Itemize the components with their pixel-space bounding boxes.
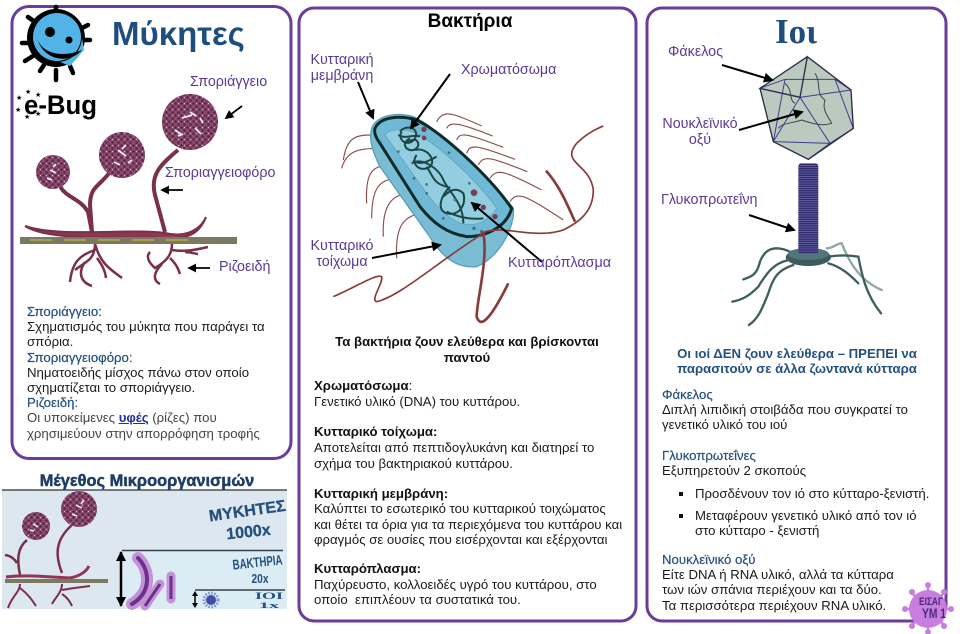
text: glycoproteins: Εξυπηρετούν 2 σκοπούς <box>662 463 806 478</box>
text: glycoproteins <box>662 448 806 478</box>
chart: microorganism size comparison: ΙΟΙ <box>255 591 284 601</box>
text: cytoplasm: οποίο επιπλέουν τα συστατικά του. <box>314 592 521 607</box>
panel: bacteria <box>299 8 636 621</box>
text block: fungi definitions: Ριζοειδή: <box>27 395 78 410</box>
text: nucleic acid: των ιών σπάνια περιέχουν και τα δύο. <box>662 582 882 597</box>
text: chromosome: Χρωματόσωμα: <box>314 378 412 393</box>
text: cell membrane: και θέτει τα όρια για τα περιεχόμενα του κυττάρου και <box>314 517 622 532</box>
text: viruses intro: Οι ιοί ΔΕΝ ζουν ελεύθερα – ΠΡΕΠΕΙ να <box>677 346 917 361</box>
text block: fungi definitions: Σποριαγγειοφόρο: <box>27 350 133 365</box>
text block: fungi definitions: Νηματοειδής μίσχος πάνω στον οποίο <box>27 365 249 380</box>
title: viruses: Ιοι <box>775 12 817 51</box>
text block: fungi definitions: Οι υποκείμενες υφές (ρίζες) που <box>27 410 217 425</box>
arrow: sporangiophore <box>162 189 183 191</box>
text block: fungi definitions: σπόρια. <box>27 334 73 349</box>
text: nucleic acid: Είτε DNA ή RNA υλικό, αλλά τα κύτταρα <box>662 567 894 582</box>
icon: e-Bug logo: ★ <box>15 106 21 114</box>
text: cell wall: Αποτελείται από πεπτιδογλυκάνη και διατηρεί το <box>314 440 594 455</box>
label: envelope: Φάκελος <box>668 44 723 60</box>
text: viruses intro: παρασιτούν σε άλλα ζωντανά κύτταρα <box>677 361 917 376</box>
text: cell membrane: Κυτταρική μεμβράνη: <box>314 486 448 501</box>
label: cell membrane <box>310 52 374 84</box>
arrow: chromosome <box>411 74 450 128</box>
text: viruses intro <box>677 346 917 376</box>
text: cell membrane: φραγμός σε ουσίες που εισέρχονται και εξέρχονται <box>314 532 608 547</box>
arrow: cytoplasm <box>472 203 542 262</box>
text: bacteria intro <box>335 334 599 365</box>
arrow: sporangium <box>226 106 242 118</box>
text: cell membrane: Καλύπτει το εσωτερικό του κυτταρικού τοιχώματος <box>314 501 606 516</box>
label: glycoprotein: Γλυκοπρωτεΐνη <box>661 192 757 208</box>
text: cytoplasm: Κυτταρόπλασμα: <box>314 561 421 576</box>
text: nucleic acid <box>662 552 894 613</box>
label: nucleic acid: οξύ <box>689 132 711 148</box>
text: glycoproteins: Γλυκοπρωτεΐνες <box>662 448 756 463</box>
text: cell wall: σχήμα του βακτηριακού κυττάρου. <box>314 456 513 471</box>
text block: fungi definitions: χρησιμεύουν στην απορρόφηση τροφής <box>27 426 260 441</box>
chart: microorganism size comparison <box>2 490 287 610</box>
title: fungi: Μύκητες <box>112 15 245 52</box>
chart: microorganism size comparison: 1000x <box>226 522 272 543</box>
label: cell wall <box>311 238 373 270</box>
icon: year-group virus badge: ΥΜ 1 <box>922 605 946 621</box>
arrow: envelope <box>722 65 772 80</box>
icon: e-Bug logo: ★ <box>35 91 41 99</box>
text block: fungi definitions <box>27 304 265 441</box>
text block: fungi definitions: σχηματίζεται το σποριάγγειο. <box>27 380 195 395</box>
chart: microorganism size comparison: ΒΑΚΤΗΡΙΑ <box>232 551 283 573</box>
label: sporangium: Σποριάγγειο <box>190 74 267 90</box>
label: cell wall: Κυτταρικό <box>311 238 373 254</box>
label: sporangiophore: Σποριαγγειοφόρο <box>165 165 275 181</box>
title: bacteria: Βακτήρια <box>428 11 512 32</box>
bullet list: glycoprotein purposes <box>679 486 929 538</box>
text: cytoplasm <box>314 561 597 607</box>
chart: microorganism size comparison: ΜΥΚΗΤΕΣ <box>208 498 287 525</box>
text: envelope: Φάκελος <box>662 387 713 402</box>
text: cytoplasm: Παχύρευστο, κολλοειδές υγρό του κυττάρου, στο <box>314 577 597 592</box>
illustration: bacterium <box>333 114 603 322</box>
text: envelope: Διπλή λιπιδική στοιβάδα που συγκρατεί το <box>662 402 908 417</box>
label: nucleic acid: Νουκλεϊνικό <box>662 116 738 132</box>
label: cell membrane: μεμβράνη <box>311 68 373 84</box>
icon: year-group virus badge: ΕΙΣΑΓ <box>919 596 943 608</box>
label: chromosome: Χρωματόσωμα <box>461 62 556 78</box>
icon: e-Bug logo: ★ <box>24 113 30 121</box>
chart: microorganism size comparison: 1x <box>259 601 279 610</box>
icon: e-Bug logo: ★ <box>35 110 41 118</box>
illustration: fungus with sporangia <box>20 94 237 286</box>
text: chromosome <box>314 378 520 409</box>
text: cell membrane <box>314 486 622 547</box>
chart: microorganism size comparison: 20x <box>252 571 269 586</box>
panel: viruses <box>647 8 946 621</box>
panel: fungi <box>12 6 291 458</box>
arrow: cell membrane <box>358 82 373 118</box>
text: nucleic acid: Τα περισσότερα περιέχουν RNA υλικό. <box>662 598 886 613</box>
icon: e-Bug logo: e-Bug <box>24 90 97 120</box>
text: cell wall <box>314 424 594 471</box>
text: chromosome: Γενετικό υλικό (DNA) του κυττάρου. <box>314 394 520 409</box>
bullet list: glycoprotein purposes: Μεταφέρουν γενετικό υλικό από τον ιό <box>695 508 917 523</box>
icon: e-Bug logo: ★ <box>25 88 31 96</box>
text: envelope: γενετικό υλικό του ιού <box>662 417 787 432</box>
arrow: nucleic acid <box>739 112 802 130</box>
label: cell membrane: Κυτταρική <box>310 52 374 68</box>
arrow: rhizoid <box>189 267 210 269</box>
heading: microorganism sizes: Μέγεθος Μικροοργανισμών <box>40 472 254 490</box>
icon: e-Bug logo <box>15 7 97 121</box>
text: envelope <box>662 387 908 432</box>
bullet list: glycoprotein purposes: στο κύτταρο - ξενιστή <box>695 523 819 538</box>
label: cell wall: τοίχωμα <box>316 254 368 270</box>
icon: e-Bug logo: ★ <box>16 94 22 102</box>
text: bacteria intro: παντού <box>444 350 490 365</box>
text block: fungi definitions: Σχηματισμός του μύκητα που παράγει τα <box>27 319 265 334</box>
label: cytoplasm: Κυτταρόπλασμα <box>508 255 611 271</box>
label: nucleic acid <box>662 116 738 148</box>
arrow: cell wall <box>372 245 440 258</box>
text block: fungi definitions: Σποριάγγειο: <box>27 304 102 319</box>
illustration: bacteriophage virus <box>732 57 882 325</box>
bullet list: glycoprotein purposes: Προσδένουν τον ιό στο κύτταρο-ξενιστή. <box>695 486 929 501</box>
label: rhizoid: Ριζοειδή <box>219 259 270 275</box>
icon: year-group virus badge <box>902 582 954 634</box>
text: cell wall: Κυτταρικό τοίχωμα: <box>314 424 437 439</box>
arrow: glycoprotein <box>749 215 794 230</box>
text: bacteria intro: Τα βακτήρια ζουν ελεύθερα και βρίσκονται <box>335 334 599 349</box>
text: nucleic acid: Νουκλεϊνικό οξύ <box>662 552 755 567</box>
